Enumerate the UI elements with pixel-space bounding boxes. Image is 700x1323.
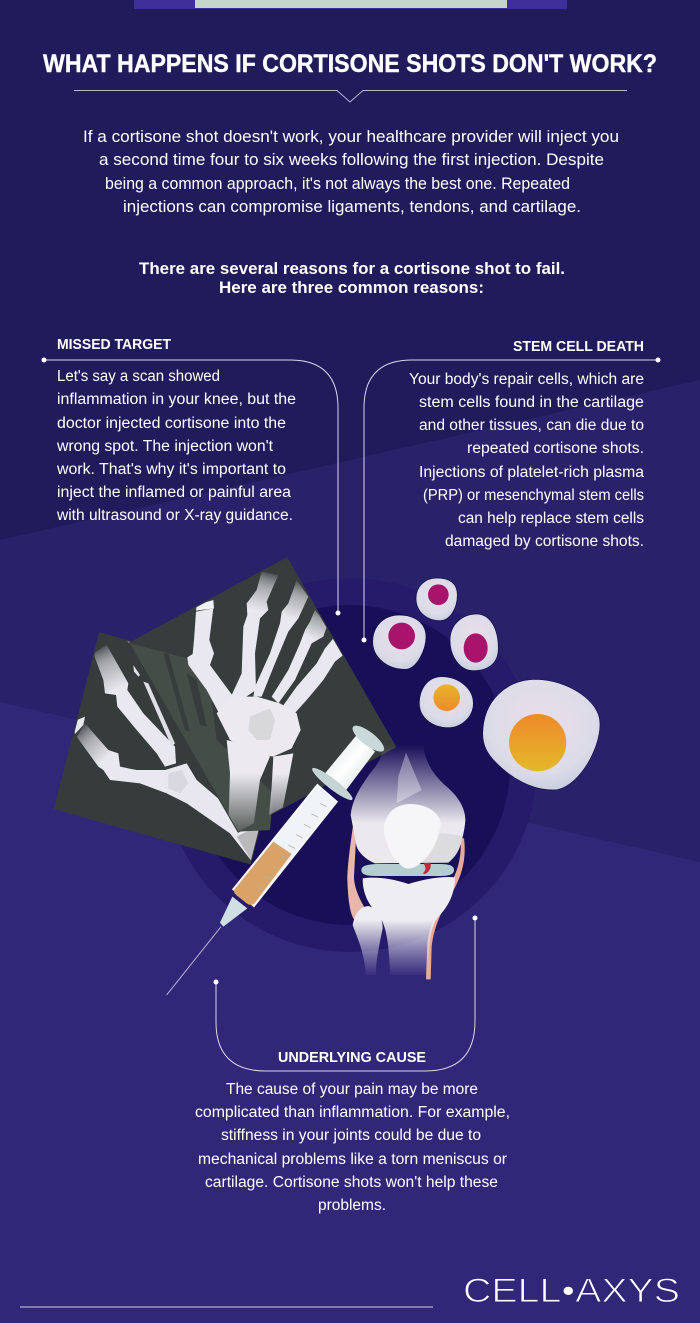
connector: stem cell death xyxy=(362,358,660,642)
top banner xyxy=(134,0,567,9)
heading: stem cell death: STEM CELL DEATH xyxy=(513,339,644,355)
meniscus xyxy=(361,864,454,876)
text: underlying cause: mechanical problems like a torn meniscus or xyxy=(198,1151,507,1168)
heading: missed target: MISSED TARGET xyxy=(57,337,171,353)
intro paragraph: being a common approach, it's not always the best one. Repeated xyxy=(105,175,570,193)
cell orange large xyxy=(483,679,600,790)
subheading xyxy=(139,260,565,297)
syringe liquid xyxy=(234,842,292,905)
intro paragraph: If a cortisone shot doesn't work, your healthcare provider will inject you xyxy=(83,128,619,146)
intro paragraph xyxy=(83,128,619,216)
text: stem cell death: can help replace stem cells xyxy=(458,510,644,527)
syringe xyxy=(167,722,388,995)
plunger xyxy=(325,722,388,792)
title divider with notch xyxy=(74,90,627,102)
connector: underlying cause xyxy=(214,916,478,1071)
stem cells xyxy=(373,578,600,790)
text: stem cell death: Injections of platelet-rich plasma xyxy=(419,464,644,481)
text: underlying cause: complicated than inflammation. For example, xyxy=(195,1104,510,1121)
cell orange small xyxy=(419,677,473,728)
knee joint xyxy=(347,745,465,979)
heading: underlying cause: UNDERLYING CAUSE xyxy=(278,1050,426,1066)
cell left xyxy=(373,615,426,669)
text: underlying cause: The cause of your pain may be more xyxy=(226,1081,478,1098)
title: WHAT HAPPENS IF CORTISONE SHOTS DON'T WORK? xyxy=(43,50,657,78)
femur xyxy=(351,745,465,863)
text: missed target xyxy=(56,368,296,524)
tibia xyxy=(363,877,455,975)
connector: missed target xyxy=(42,358,340,616)
needle xyxy=(167,927,221,995)
text: missed target: with ultrasound or X-ray guidance. xyxy=(56,507,293,524)
syringe barrel xyxy=(233,784,337,907)
text: missed target: inflammation in your knee, but the xyxy=(57,391,296,408)
front x-ray film xyxy=(130,558,395,838)
fibula xyxy=(353,906,383,975)
x-ray films with hand bones xyxy=(55,558,395,863)
text: underlying cause: cartilage. Cortisone shots won't help these xyxy=(205,1174,498,1191)
left ligament xyxy=(347,823,364,919)
intro paragraph: a second time four to six weeks following the first injection. Despite xyxy=(99,151,604,169)
text: underlying cause: stiffness in your joints could be due to xyxy=(221,1127,481,1144)
intro paragraph: injections can compromise ligaments, tendons, and cartilage. xyxy=(123,198,581,216)
text: stem cell death: repeated cortisone shots. xyxy=(467,440,644,457)
tear xyxy=(423,863,431,874)
text: stem cell death: (PRP) or mesenchymal stem cells xyxy=(423,487,644,504)
subheading: There are several reasons for a cortisone shot to fail. xyxy=(139,260,565,278)
text: underlying cause: problems. xyxy=(318,1197,386,1214)
right ligament xyxy=(426,838,465,979)
subheading: Here are three common reasons: xyxy=(219,279,484,297)
patella xyxy=(384,804,441,869)
text: stem cell death: and other tissues, can die due to xyxy=(419,417,644,434)
text: missed target: Let's say a scan showed xyxy=(57,368,220,385)
text: underlying cause xyxy=(195,1081,510,1214)
rear x-ray film xyxy=(54,632,260,864)
footer line xyxy=(20,1306,433,1308)
text: stem cell death: damaged by cortisone shots. xyxy=(445,533,644,550)
dark circle backdrop xyxy=(163,578,537,952)
text: missed target: wrong spot. The injection won't xyxy=(56,438,274,455)
logo: CELL•AXYS xyxy=(463,1272,680,1310)
text: missed target: work. That's why it's important to xyxy=(56,461,286,478)
text: stem cell death xyxy=(409,371,644,550)
syringe scale ticks xyxy=(257,803,327,890)
text: missed target: inject the inflamed or painful area xyxy=(57,484,291,501)
text: stem cell death: stem cells found in the cartilage xyxy=(419,394,644,411)
syringe tip xyxy=(220,897,247,927)
text: missed target: doctor injected cortisone into the xyxy=(57,415,286,432)
text: stem cell death: Your body's repair cells, which are xyxy=(409,371,644,388)
cell right xyxy=(450,614,498,671)
flange xyxy=(309,764,355,804)
cell small top xyxy=(416,578,457,621)
